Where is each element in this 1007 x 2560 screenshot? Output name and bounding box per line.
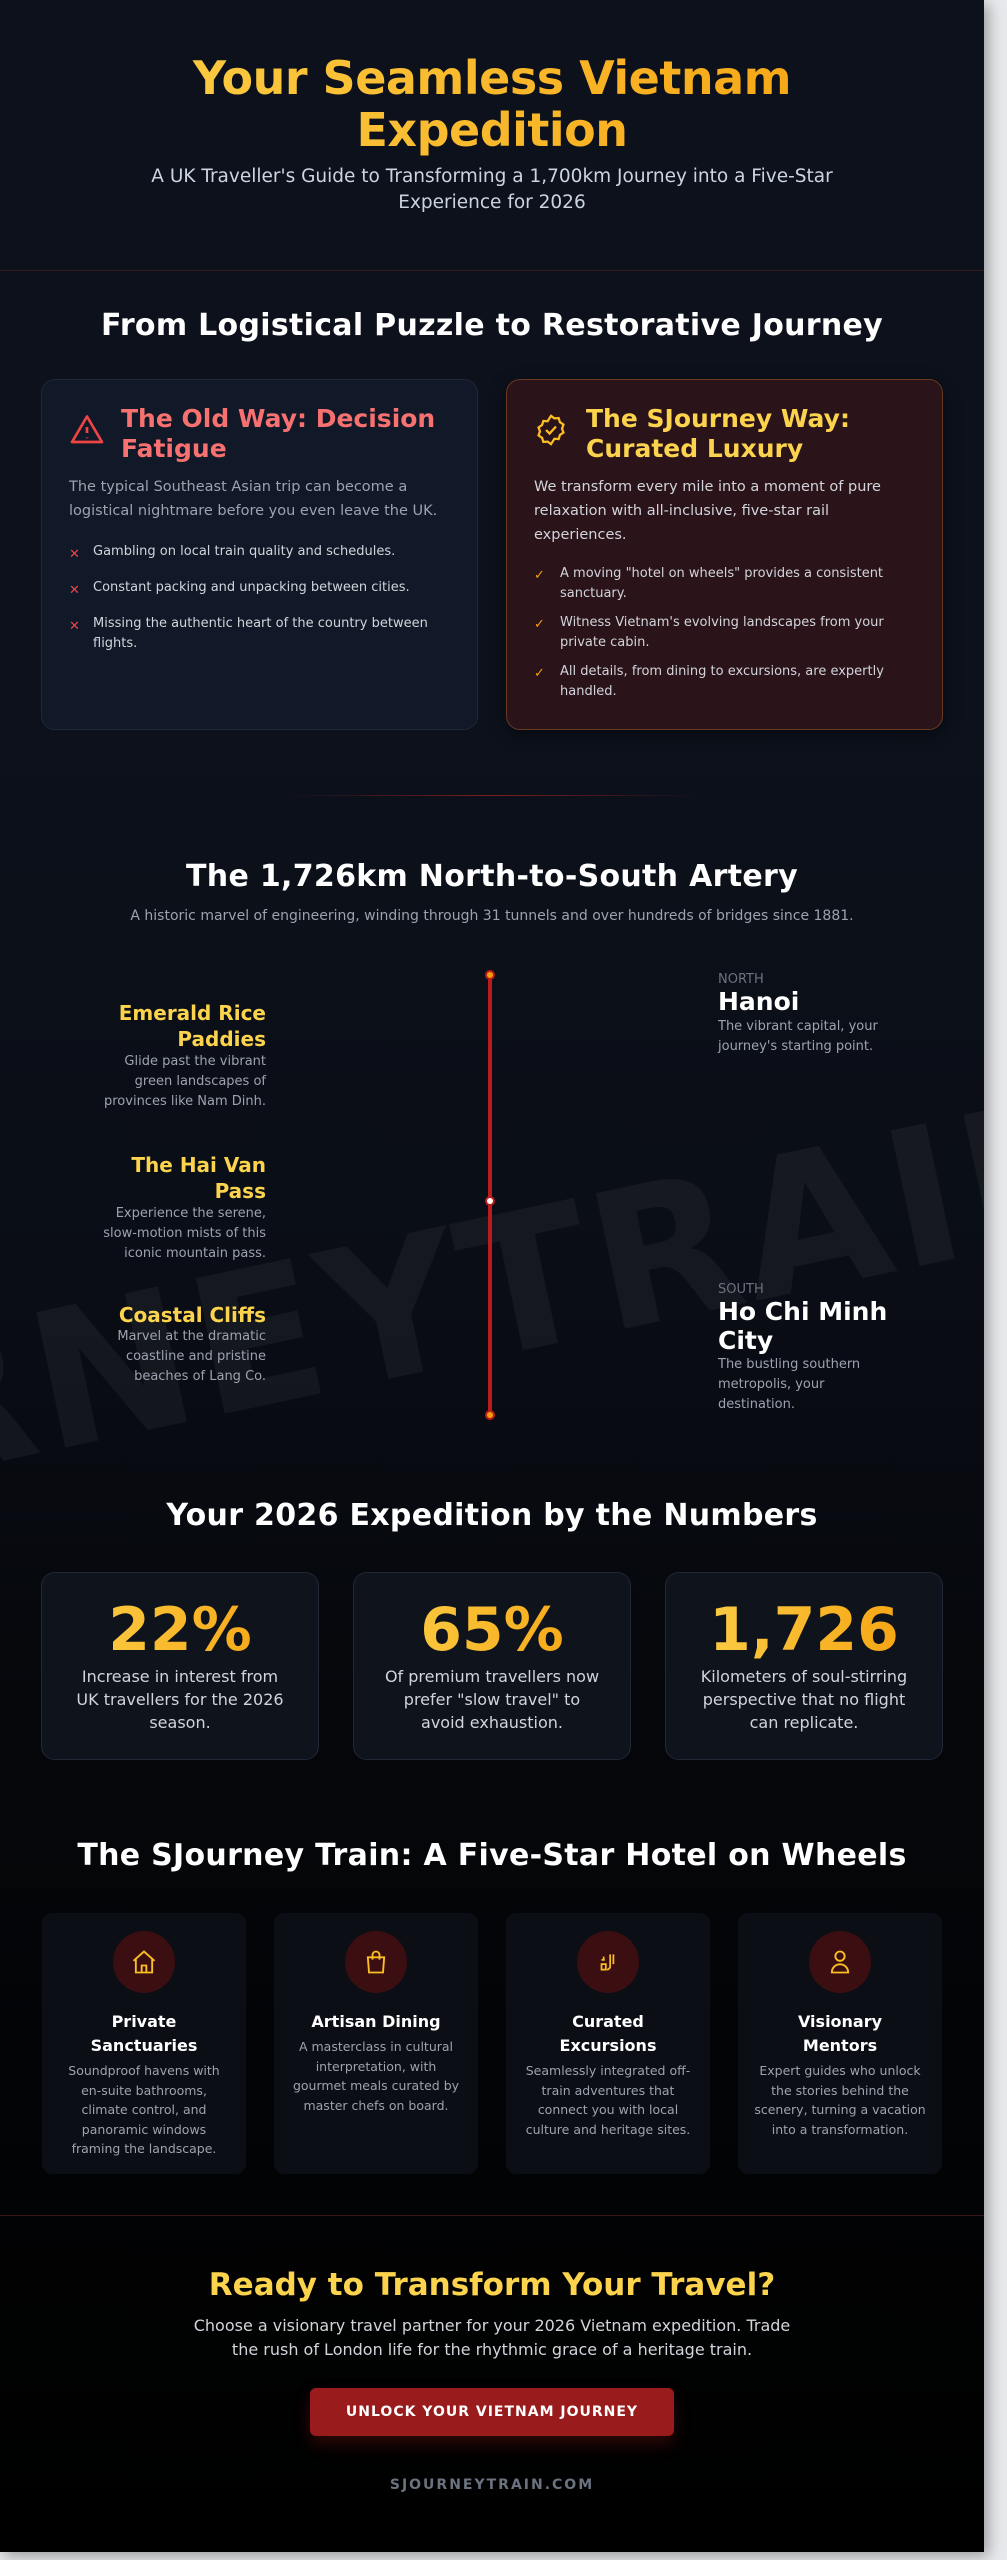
heading: from logistical puzzle: From Logistical Puzzle to Restorative Journey bbox=[101, 308, 883, 343]
feature: private sanctuaries bbox=[42, 1913, 246, 2174]
icon: bag bbox=[345, 1931, 407, 1993]
old way text: The typical Southeast Asian trip can become a logistical nightmare before you even leave the UK. bbox=[69, 479, 437, 519]
panel: old way bbox=[41, 379, 478, 730]
old way list: Constant packing and unpacking between cities. bbox=[93, 580, 410, 595]
stat: 1,726: Kilometers of soul-stirring perspective that no flight can replicate. bbox=[701, 1667, 907, 1732]
sjourney list: ✓ bbox=[534, 617, 545, 632]
old way list: ✕ bbox=[69, 547, 80, 562]
subtitle: A UK Traveller's Guide to Transforming a 1,700km Journey into a Five-Star bbox=[151, 166, 833, 187]
feature: artisan dining bbox=[274, 1913, 478, 2174]
stop: emerald rice paddies: Emerald Rice Paddies bbox=[119, 1001, 266, 1051]
stat: 22% bbox=[41, 1572, 319, 1760]
title: Expedition bbox=[356, 103, 628, 157]
stop: coastal cliffs: Coastal Cliffs bbox=[119, 1303, 266, 1327]
stop: emerald rice paddies bbox=[104, 1001, 266, 1109]
cta button: UNLOCK YOUR VIETNAM JOURNEY bbox=[346, 2404, 638, 2420]
stat: 22%: Increase in interest from UK travellers for the 2026 season. bbox=[76, 1667, 284, 1732]
sjourney title: The SJourney Way: bbox=[586, 404, 850, 433]
feature: curated excursions: Seamlessly integrated off-train adventures that connect you with local culture and heritage sites. bbox=[526, 2063, 690, 2136]
old way list: Gambling on local train quality and schedules. bbox=[93, 544, 395, 559]
feature: artisan dining: Artisan Dining bbox=[311, 2012, 441, 2031]
subtitle: Experience for 2026 bbox=[398, 192, 586, 213]
stop: hanoi: The vibrant capital, your journey's starting point. bbox=[718, 1019, 878, 1054]
feature: visionary mentors: Visionary bbox=[798, 2012, 882, 2031]
sjourney text: We transform every mile into a moment of pure relaxation with all-inclusive, five-star rail experiences. bbox=[534, 479, 881, 543]
feature: private sanctuaries: Sanctuaries bbox=[91, 2036, 197, 2055]
stat: 65% bbox=[353, 1572, 631, 1760]
old way title bbox=[121, 404, 435, 463]
cta button bbox=[310, 2388, 674, 2436]
feature: curated excursions: Excursions bbox=[560, 2036, 656, 2055]
timeline dots bbox=[485, 970, 495, 980]
stop: hai van pass bbox=[103, 1153, 266, 1261]
feature: visionary mentors: Mentors bbox=[803, 2036, 877, 2055]
title bbox=[0, 52, 984, 156]
sjourney list: ✓ bbox=[534, 568, 545, 583]
cta text: the rush of London life for the rhythmic grace of a heritage train. bbox=[232, 2340, 752, 2359]
icon: excursions bbox=[577, 1931, 639, 1993]
stat: 65%: 65% bbox=[420, 1595, 564, 1665]
old way list: Missing the authentic heart of the country between flights. bbox=[93, 616, 428, 651]
stop: coastal cliffs bbox=[117, 1303, 266, 1384]
footer: SJOURNEYTRAIN.COM bbox=[390, 2477, 594, 2493]
cta text bbox=[194, 2316, 790, 2359]
feature: curated excursions: Curated bbox=[572, 2012, 644, 2031]
stat: 1,726 bbox=[665, 1572, 943, 1760]
sjourney title bbox=[586, 404, 850, 463]
stop: ho chi minh city: The bustling southern metropolis, your destination. bbox=[718, 1357, 860, 1412]
icon: home bbox=[113, 1931, 175, 1993]
stop: coastal cliffs: Marvel at the dramatic coastline and pristine beaches of Lang Co. bbox=[117, 1329, 266, 1384]
feature: private sanctuaries: Private bbox=[112, 2012, 176, 2031]
old way list bbox=[69, 544, 428, 651]
sjourney list: A moving "hotel on wheels" provides a consistent sanctuary. bbox=[560, 566, 883, 601]
stat: 22%: 22% bbox=[108, 1595, 252, 1665]
heading: numbers: Your 2026 Expedition by the Numbers bbox=[166, 1498, 818, 1533]
feature: curated excursions bbox=[506, 1913, 710, 2174]
icon: badge check bbox=[537, 414, 565, 446]
stop: hanoi: Hanoi bbox=[718, 987, 799, 1016]
feature: private sanctuaries: Soundproof havens with en-suite bathrooms, climate control, and panoramic windows framing the landscape. bbox=[68, 2063, 220, 2156]
artery subtitle: A historic marvel of engineering, winding through 31 tunnels and over hundreds of bridges since 1881. bbox=[130, 908, 854, 924]
sjourney list: ✓ bbox=[534, 666, 545, 681]
stop: hai van pass: Experience the serene, slow-motion mists of this iconic mountain pass. bbox=[103, 1206, 266, 1261]
stop: ho chi minh city: SOUTH bbox=[718, 1282, 764, 1297]
panel: sjourney way bbox=[506, 379, 943, 730]
old way title: The Old Way: Decision bbox=[121, 404, 435, 433]
icon: warning bbox=[70, 415, 104, 444]
cta heading: Ready to Transform Your Travel? bbox=[209, 2267, 775, 2303]
feature: visionary mentors bbox=[738, 1913, 942, 2174]
stop: ho chi minh city: Ho Chi Minh City bbox=[718, 1297, 887, 1355]
icon: person bbox=[809, 1931, 871, 1993]
old way list: ✕ bbox=[69, 583, 80, 598]
sjourney list bbox=[534, 566, 884, 699]
stop: hanoi: NORTH bbox=[718, 972, 764, 987]
heading: train: The SJourney Train: A Five-Star Hotel on Wheels bbox=[77, 1838, 907, 1873]
feature: artisan dining: A masterclass in cultural interpretation, with gourmet meals curated by master chefs on board. bbox=[293, 2039, 459, 2112]
title: Your Seamless Vietnam bbox=[193, 51, 791, 105]
cta text: Choose a visionary travel partner for your 2026 Vietnam expedition. Trade bbox=[194, 2316, 790, 2335]
old way title: Fatigue bbox=[121, 434, 227, 463]
stop: ho chi minh city bbox=[718, 1282, 887, 1412]
feature: visionary mentors: Expert guides who unlock the stories behind the scenery, turning a vacation into a transformation. bbox=[754, 2063, 926, 2136]
stat: 1,726: 1,726 bbox=[709, 1595, 899, 1665]
stop: hai van pass: The Hai Van Pass bbox=[131, 1153, 266, 1203]
timeline line bbox=[488, 975, 492, 1415]
subtitle bbox=[151, 166, 833, 213]
sjourney title: Curated Luxury bbox=[586, 434, 803, 463]
stat: 65%: Of premium travellers now prefer "slow travel" to avoid exhaustion. bbox=[385, 1667, 599, 1732]
stop: emerald rice paddies: Glide past the vibrant green landscapes of provinces like Nam Dinh. bbox=[104, 1054, 266, 1109]
stop: hanoi bbox=[718, 972, 878, 1054]
sjourney list: Witness Vietnam's evolving landscapes from your private cabin. bbox=[560, 615, 884, 650]
heading: artery: The 1,726km North-to-South Artery bbox=[186, 859, 798, 894]
sjourney list: All details, from dining to excursions, are expertly handled. bbox=[560, 664, 884, 699]
old way list: ✕ bbox=[69, 619, 80, 634]
